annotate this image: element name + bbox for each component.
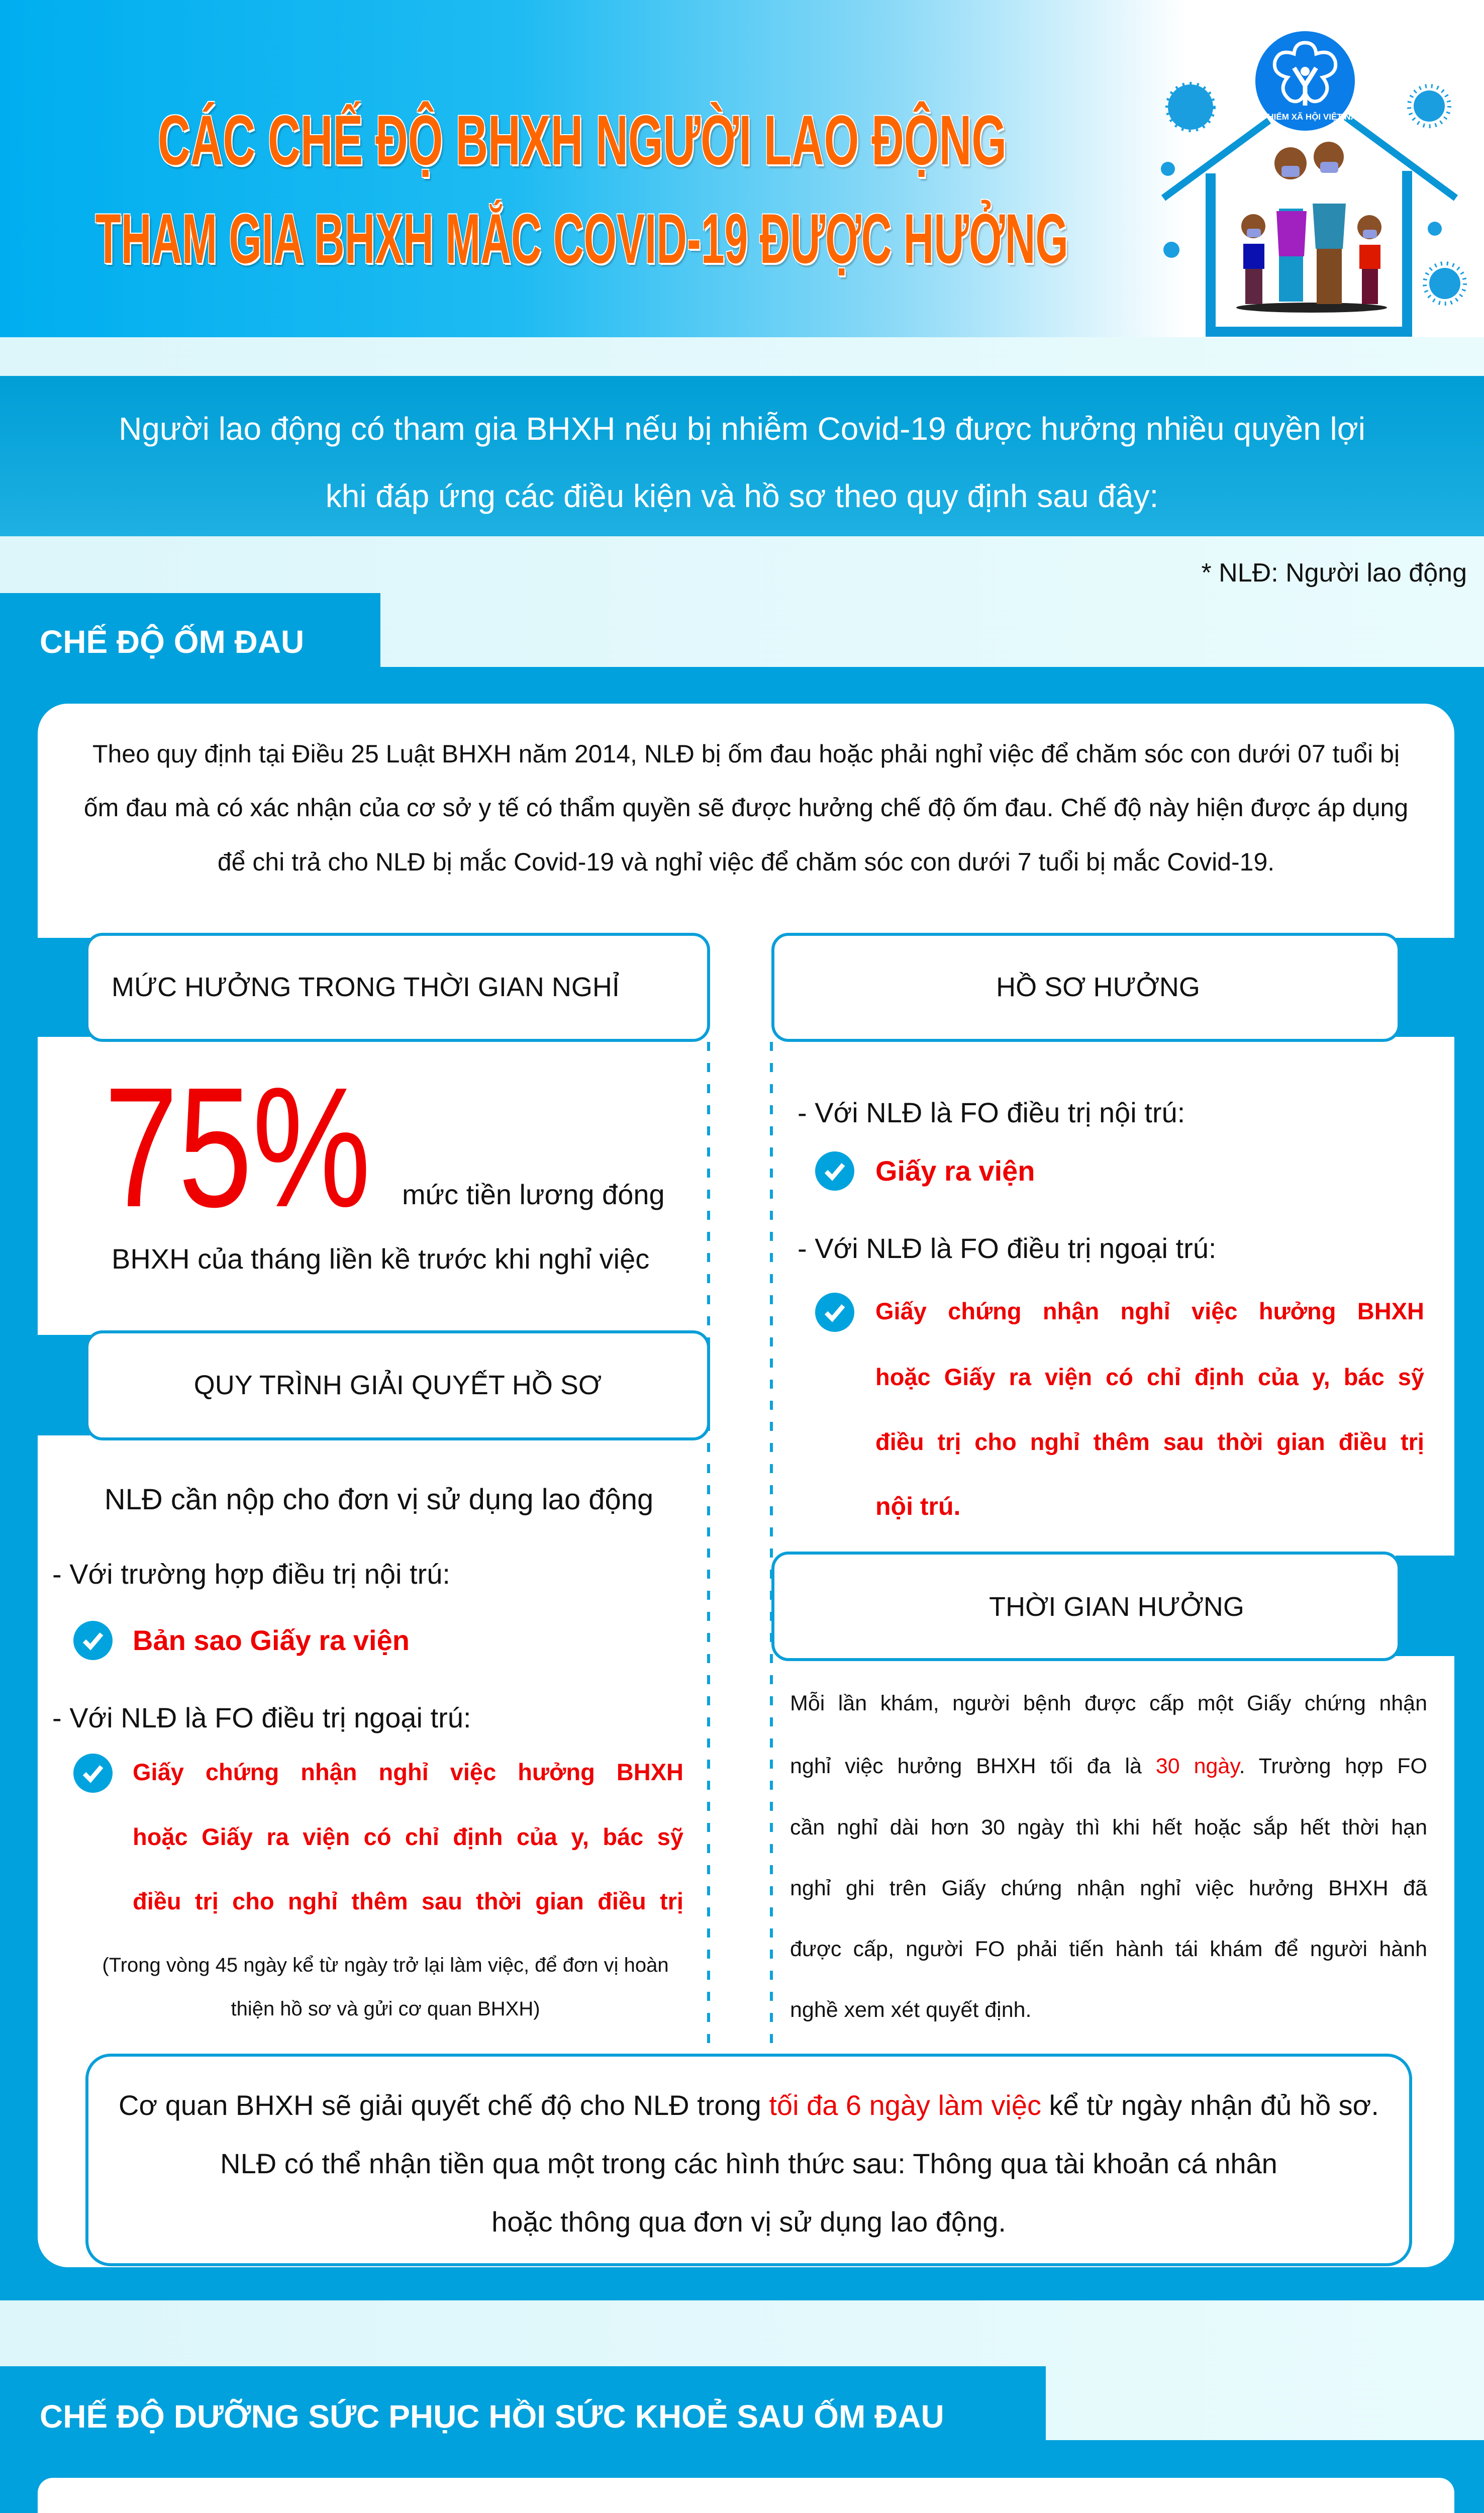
process text: - Với NLĐ là FO điều trị ngoại trú: — [52, 1702, 471, 1733]
process text — [52, 1483, 683, 2020]
75% figure: BHXH của tháng liền kề trước khi nghỉ việc — [112, 1243, 649, 1275]
duration paragraph: nghề xem xét quyết định. — [790, 1998, 1031, 2022]
intro paragraph section 1 — [84, 740, 1408, 876]
payment callout box: Cơ quan BHXH sẽ giải quyết chế độ cho NLĐ trong tối đa 6 ngày làm việc kể từ ngày nhận đủ hồ sơ. — [119, 2089, 1379, 2121]
header: HỒ SƠ HƯỞNG — [771, 933, 1454, 1042]
logo — [1246, 31, 1364, 131]
documents list: Giấy ra viện — [875, 1155, 1035, 1187]
intro band — [0, 376, 1484, 536]
logo: BẢO HIỂM XÃ HỘI VIỆT NAM — [1246, 112, 1364, 122]
75% figure — [104, 1052, 665, 1275]
header: MỨC HƯỞNG (sec1): MỨC HƯỞNG TRONG THỜI GIAN NGHỈ — [112, 972, 620, 1002]
process text: NLĐ cần nộp cho đơn vị sử dụng lao động — [105, 1483, 653, 1516]
process text: Bản sao Giấy ra viện — [133, 1624, 410, 1656]
duration paragraph: nghỉ ghi trên Giấy chứng nhận nghỉ việc hưởng BHXH đã — [790, 1876, 1427, 1900]
payment callout box: NLĐ có thể nhận tiền qua một trong các hình thức sau: Thông qua tài khoản cá nhân — [220, 2148, 1277, 2179]
section 1 tab: CHẾ ĐỘ ỐM ĐAU — [0, 593, 380, 668]
header: QUY TRÌNH — [38, 1330, 710, 1440]
documents list — [798, 1097, 1424, 1520]
header: MỨC HƯỞNG (sec1) — [38, 933, 710, 1042]
process text: Giấy chứng nhận nghỉ việc hưởng BHXH — [133, 1759, 683, 1785]
illustration: family in house with BHXH logo — [1161, 31, 1467, 337]
white content card — [38, 704, 1454, 2267]
documents list: - Với NLĐ là FO điều trị ngoại trú: — [798, 1232, 1216, 1264]
people — [1236, 142, 1387, 313]
intro text: Người lao động có tham gia BHXH nếu bị nhiễm Covid-19 được hưởng nhiều quyền lợi — [119, 411, 1365, 447]
header: QUY TRÌNH: QUY TRÌNH GIẢI QUYẾT HỒ SƠ — [194, 1370, 602, 1400]
section 2 tab — [0, 2366, 1046, 2442]
section 2 tab: CHẾ ĐỘ DƯỠNG SỨC PHỤC HỒI SỨC KHOẺ SAU ỐM ĐAU — [40, 2398, 944, 2435]
intro band: khi đáp ứng các điều kiện và hồ sơ theo quy định sau đây: — [326, 478, 1158, 514]
intro paragraph section 1: để chi trả cho NLĐ bị mắc Covid-19 và nghỉ việc để chăm sóc con dưới 7 tuổi bị mắc Covid-19. — [218, 848, 1274, 876]
duration paragraph: nghỉ việc hưởng BHXH tối đa là 30 ngày. Trường hợp FO — [790, 1754, 1427, 1778]
house — [1163, 117, 1456, 332]
payment callout box: hoặc thông qua đơn vị sử dụng lao động. — [491, 2206, 1006, 2238]
documents list: hoặc Giấy ra viện có chỉ định của y, bác sỹ — [875, 1364, 1424, 1390]
viruses — [1161, 84, 1465, 304]
header: HỒ SƠ HƯỞNG: HỒ SƠ HƯỞNG — [996, 972, 1200, 1002]
duration paragraph — [790, 1691, 1427, 2022]
title — [95, 101, 1068, 280]
75% figure: mức tiền lương đóng — [402, 1179, 665, 1210]
section 2 panel — [0, 2440, 1484, 2513]
duration paragraph: cần nghỉ dài hơn 30 ngày thì khi hết hoặc sắp hết thời hạn — [790, 1815, 1427, 1840]
intro paragraph section 1: Theo quy định tại Điều 25 Luật BHXH năm 2014, NLĐ bị ốm đau hoặc phải nghỉ việc để chăm sóc con dưới 07 tuổi bị — [92, 740, 1400, 768]
header: THỜI GIAN HƯỞNG (sec1) — [771, 1552, 1454, 1661]
process text: hoặc Giấy ra viện có chỉ định của y, bác sỹ — [133, 1823, 683, 1850]
title: THAM GIA BHXH MẮC COVID-19 ĐƯỢC HƯỞNG — [95, 199, 1068, 278]
documents list: - Với NLĐ là FO điều trị nội trú: — [798, 1097, 1185, 1128]
intro paragraph section 1: ốm đau mà có xác nhận của cơ sở y tế có thẩm quyền sẽ được hưởng chế độ ốm đau. Chế độ này hiện được áp dụng — [84, 794, 1408, 822]
footnote: * NLĐ: Người lao động — [1201, 558, 1467, 588]
process text: (Trong vòng 45 ngày kể từ ngày trở lại làm việc, để đơn vị hoàn — [102, 1954, 669, 1976]
white card — [38, 2478, 1454, 2513]
header: THỜI GIAN HƯỞNG (sec1): THỜI GIAN HƯỞNG — [989, 1592, 1244, 1622]
title: CÁC CHẾ ĐỘ BHXH NGƯỜI LAO ĐỘNG — [158, 101, 1006, 179]
duration paragraph: Mỗi lần khám, người bệnh được cấp một Giấy chứng nhận — [790, 1691, 1427, 1715]
75% figure: 75% — [104, 1052, 371, 1243]
documents list: nội trú. — [875, 1492, 960, 1520]
process text: thiện hồ sơ và gửi cơ quan BHXH) — [231, 1998, 540, 2020]
documents list: Giấy chứng nhận nghỉ việc hưởng BHXH — [875, 1298, 1424, 1324]
duration paragraph: được cấp, người FO phải tiến hành tái khám để người hành — [790, 1937, 1427, 1961]
header banner — [0, 0, 1484, 337]
process text: - Với trường hợp điều trị nội trú: — [52, 1558, 450, 1590]
section 1 tab: CHẾ ĐỘ ỐM ĐAU: CHẾ ĐỘ ỐM ĐAU — [40, 624, 304, 660]
documents list: điều trị cho nghỉ thêm sau thời gian điều trị — [875, 1428, 1424, 1455]
payment callout box — [85, 2054, 1412, 2266]
section 1 panel — [0, 667, 1484, 2300]
process text: điều trị cho nghỉ thêm sau thời gian điều trị — [133, 1888, 683, 1914]
